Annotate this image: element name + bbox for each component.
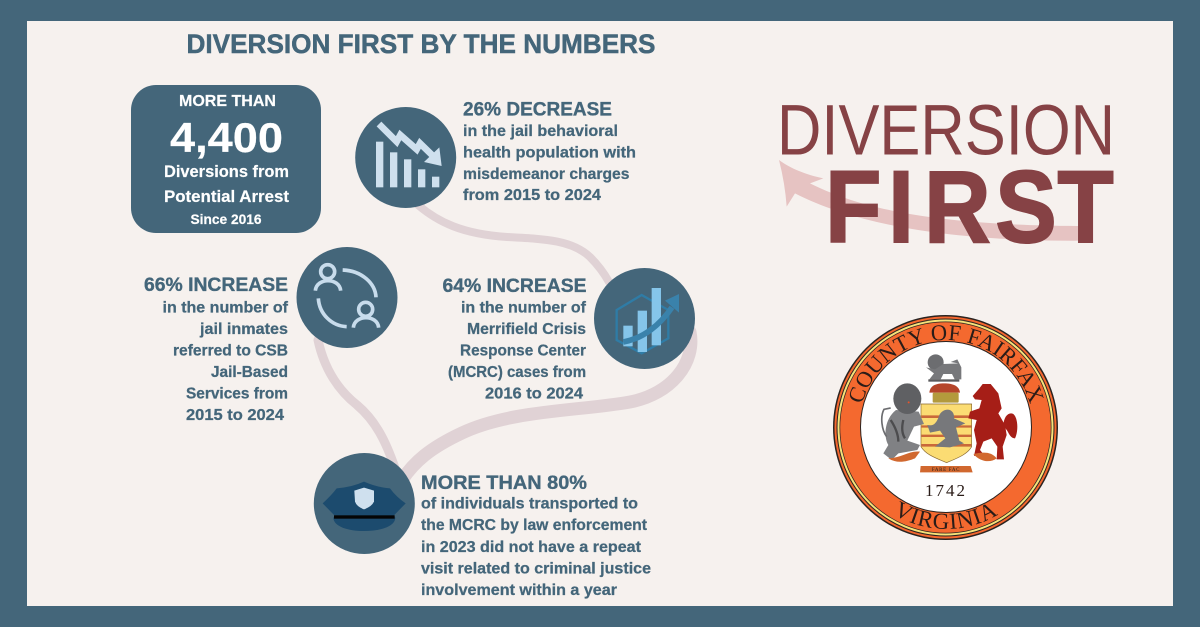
icon: falling bar chart [355, 107, 456, 208]
text: more than 80%: involvement within a year [421, 582, 617, 599]
seal: County of Fairfax [833, 315, 1058, 540]
text: 64% increase: 64% INCREASE [442, 275, 586, 297]
text: 64% increase: Response Center [460, 342, 586, 360]
text: more than 80%: visit related to criminal justice [421, 560, 651, 578]
text: 26% decrease: misdemeanor charges [463, 166, 630, 183]
icon: two people in a cycle [296, 247, 398, 348]
icon: rising bar chart in hexagon [594, 268, 695, 369]
text: more than 80%: in 2023 did not have a repeat [421, 539, 641, 556]
text: 66% increase: jail inmates [199, 321, 288, 338]
panel: more than 4,400 diversions: 4,400 [170, 114, 283, 161]
logo: Diversion First: FIRST [825, 149, 1114, 264]
text: 66% increase: 66% INCREASE [144, 274, 288, 296]
text: 64% increase: 2016 to 2024 [485, 386, 583, 402]
logo: Diversion First [777, 92, 1115, 264]
panel: more than 4,400 diversions: Potential Arrest [164, 188, 290, 206]
text: 26% decrease: 26% DECREASE [463, 98, 612, 120]
text: 66% increase: Jail-Based [211, 364, 288, 381]
icon: police cap [314, 453, 415, 554]
seal text: 1742: 1742 [925, 481, 967, 500]
text: more than 80%: the MCRC by law enforcement [421, 517, 647, 534]
text: 66% increase: in the number of [162, 300, 289, 316]
text: 64% increase: Merrifield Crisis [467, 321, 586, 338]
panel: more than 4,400 diversions [131, 85, 321, 233]
panel: more than 4,400 diversions: Since 2016 [190, 212, 262, 227]
seal motto: FARE FAC [932, 468, 960, 473]
text: more than 80%: of individuals transported to [421, 496, 638, 512]
seal text: County of Fairfax: COUNTY OF FAIRFAX [850, 325, 1044, 404]
text: more than 80% [421, 472, 651, 599]
text: 64% increase: in the number of [461, 300, 587, 316]
text: 66% increase [144, 274, 289, 424]
seal text: Virginia: VIRGINIA [900, 501, 998, 529]
text: 26% decrease [463, 98, 636, 204]
title: DIVERSION FIRST BY THE NUMBERS [186, 29, 656, 59]
text: 64% increase: (MCRC) cases from [448, 364, 586, 381]
panel: more than 4,400 diversions: Diversions from [164, 163, 289, 181]
panel: more than 4,400 diversions: MORE THAN [179, 93, 276, 110]
seal crest [882, 354, 1017, 473]
text: more than 80%: MORE THAN 80% [421, 472, 587, 494]
text: 26% decrease: health population with [463, 144, 636, 162]
text: 64% increase [442, 275, 587, 402]
text: 66% increase: Services from [186, 386, 288, 402]
text: 66% increase: referred to CSB [173, 342, 288, 360]
text: 66% increase: 2015 to 2024 [186, 407, 284, 424]
logo: Diversion First: DIVERSION [777, 92, 1115, 170]
text: 26% decrease: in the jail behavioral [463, 123, 618, 140]
connecting ribbon paths [318, 205, 691, 480]
text: 26% decrease: from 2015 to 2024 [463, 187, 601, 204]
